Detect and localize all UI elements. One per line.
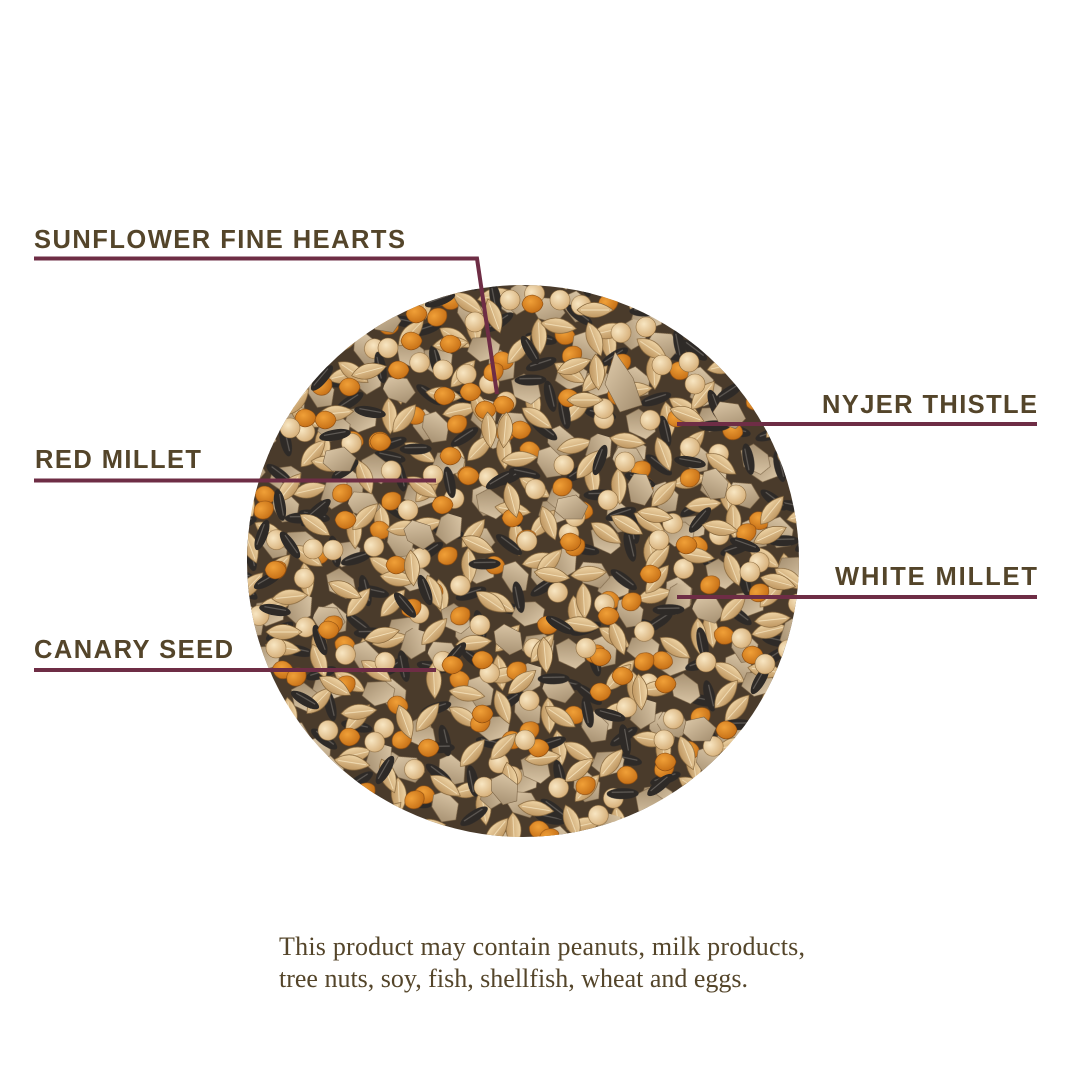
- allergen note: This product may contain peanuts, milk products,: [279, 932, 805, 961]
- label: white millet: WHITE MILLET: [835, 563, 1037, 591]
- orange red millet seeds: [265, 295, 763, 771]
- leader line: white millet: [677, 595, 1037, 599]
- allergen note: [279, 932, 805, 993]
- leader line: red millet: [34, 478, 436, 482]
- sunflower chips: [323, 304, 749, 809]
- leader line: canary seed: [34, 668, 436, 672]
- dark nyjer clusters: [251, 289, 773, 799]
- white millet seeds: [266, 290, 775, 797]
- label: red millet: RED MILLET: [35, 446, 201, 474]
- allergen note: tree nuts, soy, fish, shellfish, wheat and eggs.: [279, 964, 748, 993]
- label: nyjer thistle: NYJER THISTLE: [822, 391, 1037, 419]
- label: sunflower fine hearts: SUNFLOWER FINE HEARTS: [34, 226, 405, 254]
- leader line: nyjer thistle: [677, 422, 1037, 426]
- leader line: sunflower fine hearts: [34, 258, 497, 394]
- seed mix photo circle: [240, 280, 806, 844]
- canary seeds: [266, 297, 797, 799]
- label: canary seed: CANARY SEED: [34, 636, 233, 664]
